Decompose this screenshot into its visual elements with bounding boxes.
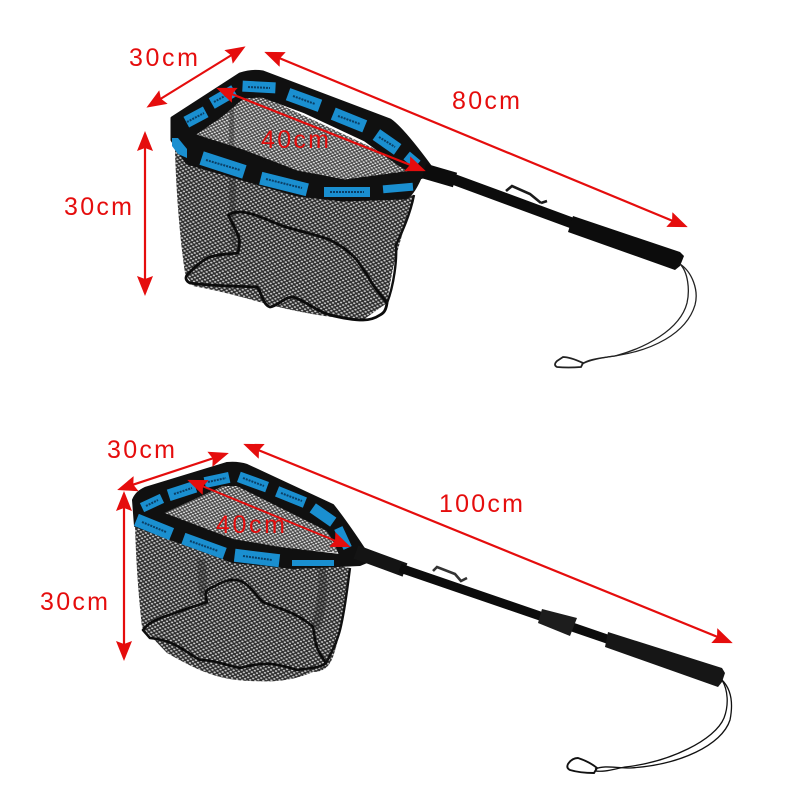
blue labels on hoop xyxy=(172,81,421,197)
label: top hoop length: 40cm xyxy=(261,126,329,154)
label: bottom hoop length: 40cm xyxy=(216,511,285,539)
label: bottom bag depth: 30cm xyxy=(40,588,108,616)
net bag xyxy=(135,525,350,681)
label: top hoop depth: 30cm xyxy=(129,44,198,72)
measurement: top net hoop length arrow xyxy=(219,89,423,170)
label: bottom total length: 100cm xyxy=(439,490,523,518)
label marks xyxy=(187,87,395,192)
product: lower landing net, 100cm xyxy=(133,463,731,773)
net shadow folds xyxy=(229,97,240,255)
measurement: bottom net bag depth arrow xyxy=(123,494,125,658)
lanyard and carabiner xyxy=(567,680,731,773)
measurement: top net bag depth arrow xyxy=(144,134,146,293)
measurement: bottom net hoop length arrow xyxy=(190,481,348,546)
label: top total length: 80cm xyxy=(452,87,520,115)
handle: collar, shaft, joint and foam grip xyxy=(356,552,725,687)
measurement: bottom net hoop depth arrow xyxy=(120,454,226,489)
hoop frame xyxy=(172,71,436,200)
measurement: top net total length arrow xyxy=(267,53,685,226)
net seen through the hoop xyxy=(162,485,340,553)
hoop frame xyxy=(133,463,372,568)
right rope edge xyxy=(326,568,350,663)
label: bottom hoop depth: 30cm xyxy=(107,436,175,464)
label marks xyxy=(142,478,302,560)
net seen through the hoop xyxy=(193,96,420,180)
rope rim of net xyxy=(186,212,387,320)
net bag xyxy=(175,150,414,320)
rope rim of net xyxy=(143,580,326,670)
net shadow fold xyxy=(197,558,327,630)
measurement: bottom net total length arrow xyxy=(246,445,730,642)
product: upper landing net, 80cm xyxy=(172,71,696,367)
right rope edge xyxy=(387,195,414,303)
label: top bag depth: 30cm xyxy=(64,193,132,221)
lanyard and carabiner xyxy=(555,264,696,368)
handle: collar, shaft and foam grip xyxy=(424,171,684,270)
measurement: top net hoop depth arrow xyxy=(149,48,243,106)
blue labels on hoop xyxy=(134,472,352,567)
